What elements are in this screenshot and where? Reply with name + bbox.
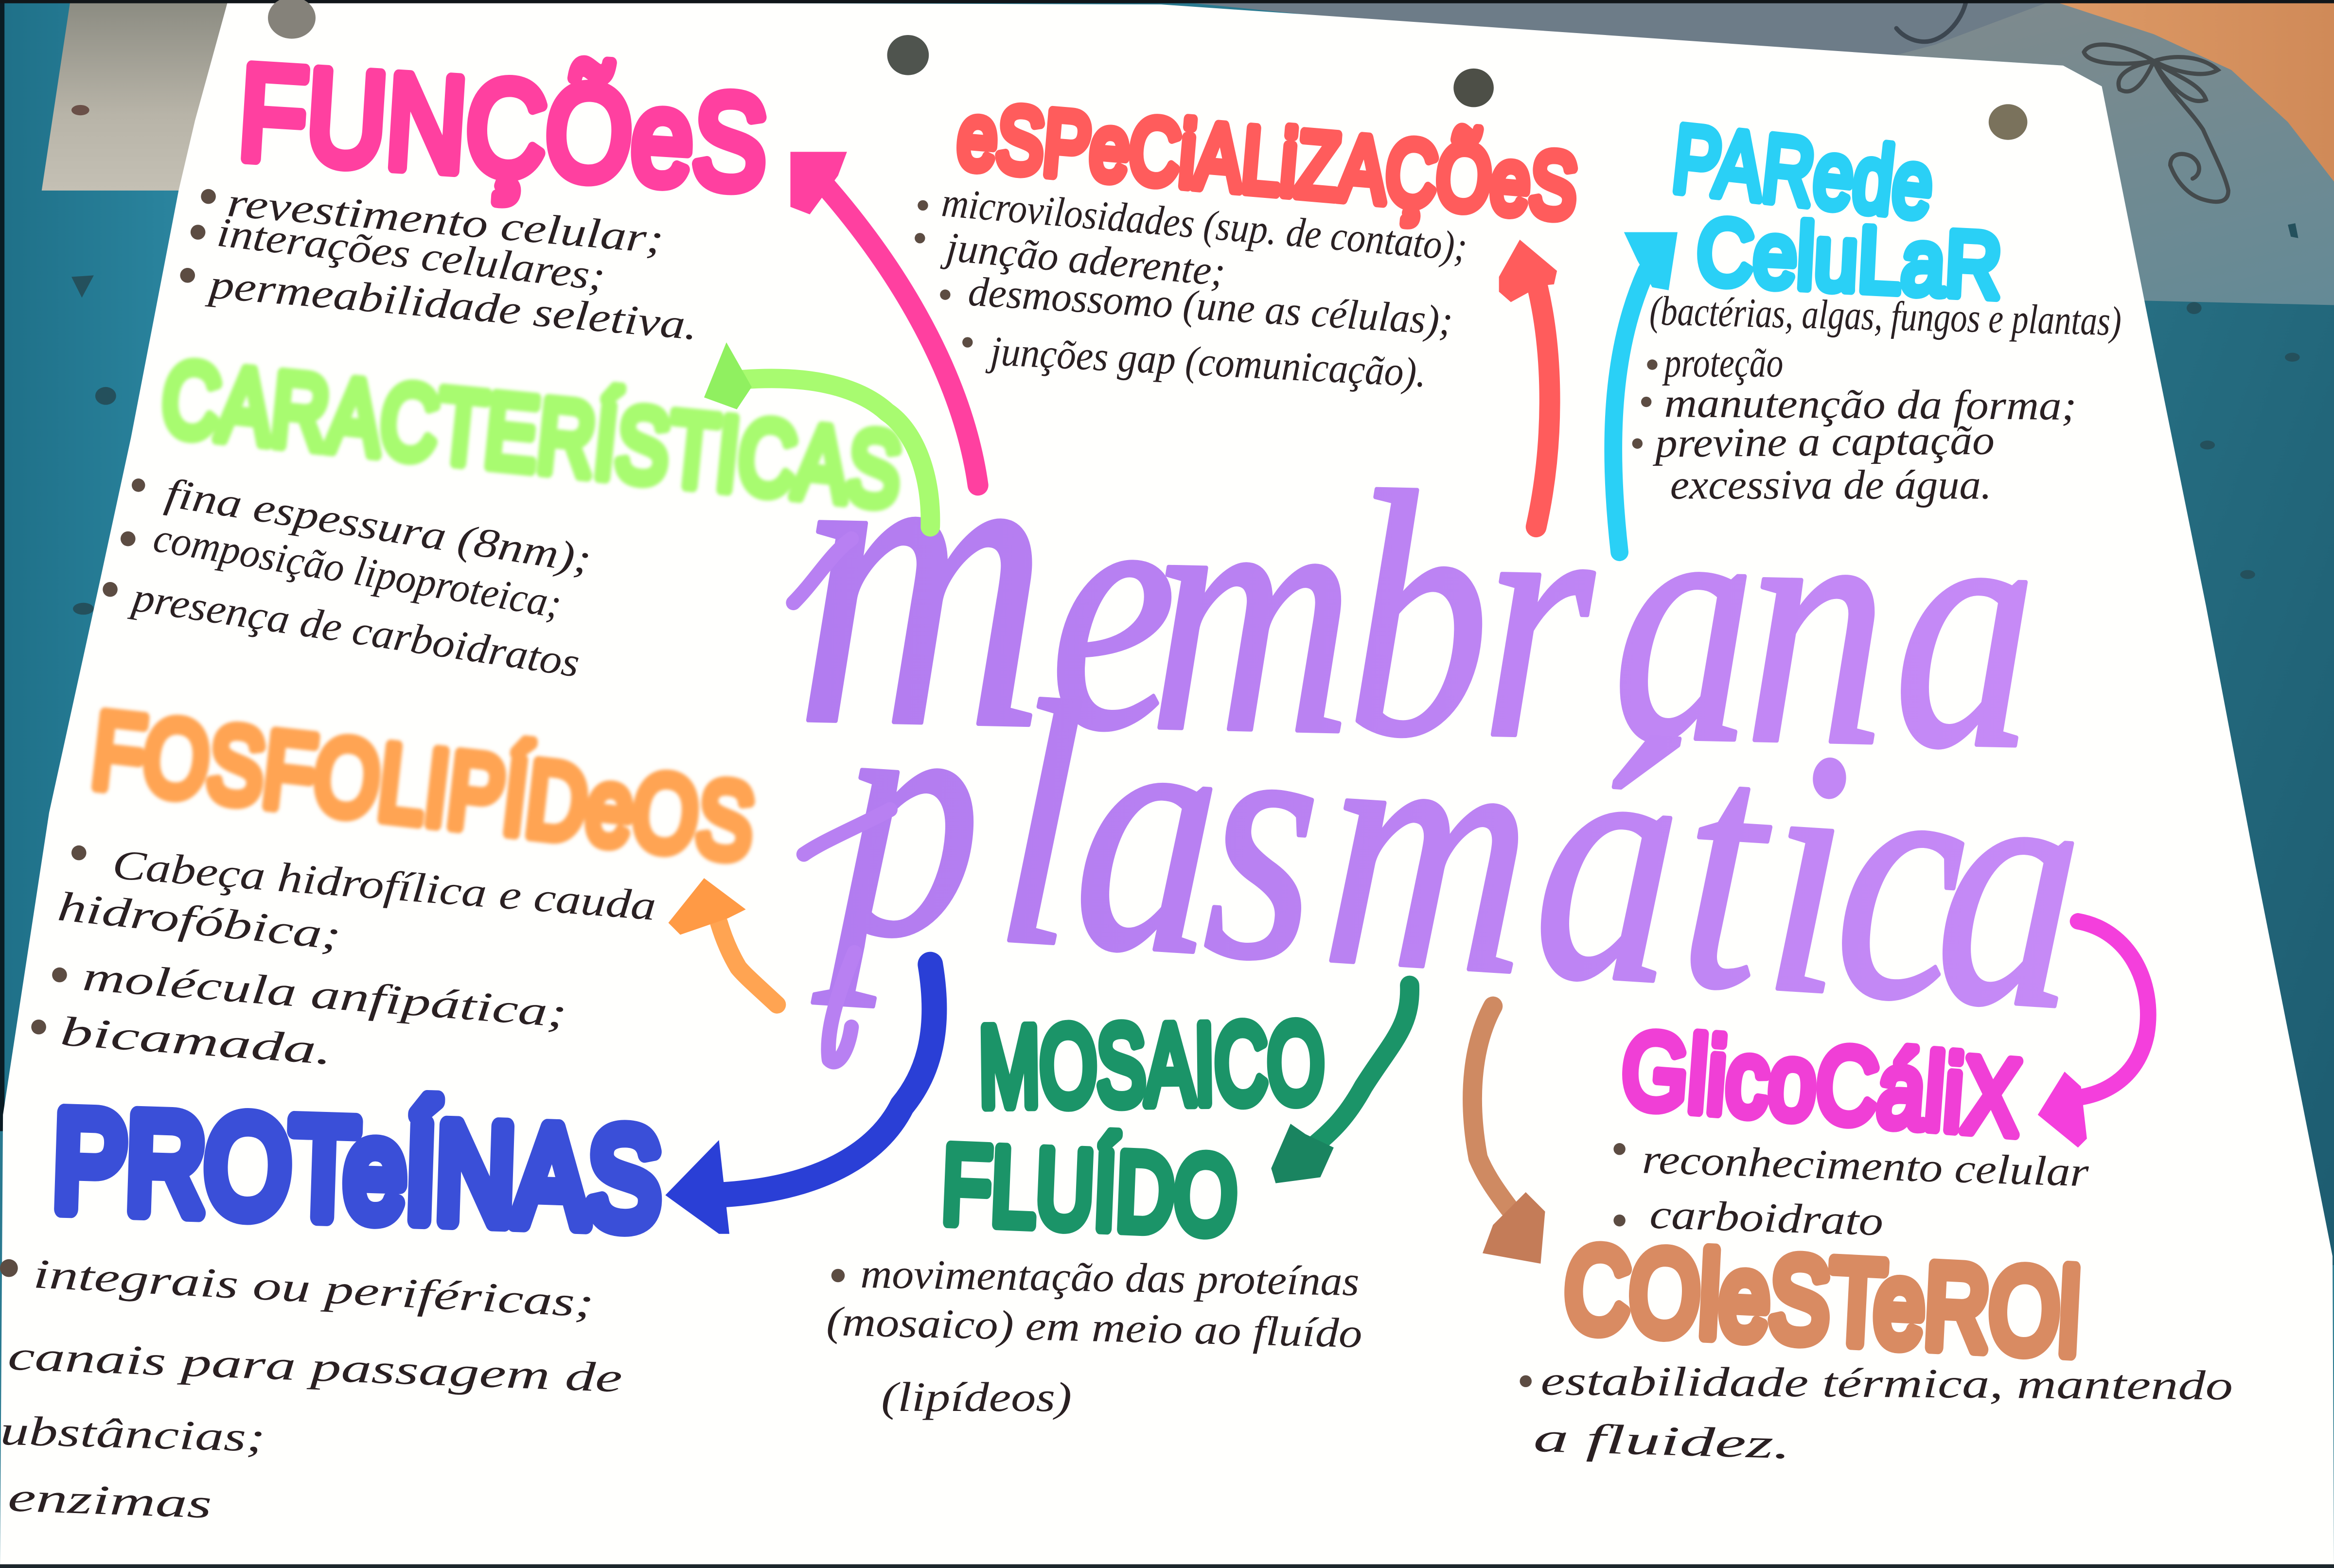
title: Membrana plasmática: m [794, 335, 1053, 818]
heading: funções: FUNÇÕeS [235, 37, 772, 219]
bullet list: colesterol: a fluidez. [1533, 1414, 1792, 1467]
panel: especializações [915, 84, 1581, 396]
bullet list: fosfolipídeos [31, 841, 658, 1074]
bullet list: fosfolipídeos: Cabeça hidrofílica e cauda [111, 841, 658, 929]
bullet list: funções: revestimento celular; [226, 179, 666, 263]
panel: proteínas [0, 1082, 663, 1527]
heading: parede celular: PARede [1668, 105, 1938, 239]
arrow: to colesterol [1472, 1006, 1545, 1264]
fabric spots [71, 105, 2300, 615]
bullet list: mosaico fluído: (mosaico) em meio ao fluído [826, 1298, 1362, 1357]
bullet list: funções: permeabilidade seletiva. [204, 261, 700, 349]
title: Membrana plasmática [794, 335, 2092, 1083]
bullet list: proteínas [0, 1251, 623, 1527]
bullet list: funções: interações celulares; [215, 209, 607, 300]
bullet list: especializações: desmossomo (une as células); [967, 268, 1454, 344]
heading: especializações: eSPeCiALiZAÇÕeS [954, 84, 1581, 239]
bullet list: características: fina espessura (8nm); [162, 470, 594, 582]
bullet list: colesterol: estabilidade térmica, mantendo [1540, 1357, 2233, 1409]
title: Membrana plasmática: plasmática [811, 617, 2092, 1083]
bullet list: glicocálix: carboidrato [1649, 1191, 1884, 1245]
bullet list: características [103, 470, 594, 686]
heading: colesterol: COleSTeROl [1562, 1221, 2083, 1379]
bullet list: parede celular: (bactérias, algas, fungos e plantas) [1649, 287, 2122, 344]
heading: proteínas: PROTeÍNAS [51, 1082, 663, 1257]
bullet list: proteínas: enzimas [7, 1474, 212, 1527]
bullet list: glicocálix: reconhecimento celular [1642, 1136, 2089, 1196]
bullet list: parede celular: previne a captação [1652, 417, 1995, 466]
heading: parede celular [1668, 105, 2004, 317]
arrow: to glicocálix [2038, 921, 2148, 1147]
bullet list: mosaico fluído [826, 1251, 1362, 1420]
bullet list: colesterol [1520, 1357, 2233, 1467]
heading: mosaico fluído: FLUÍDO [940, 1123, 1239, 1258]
panel: parede celular [1632, 105, 2122, 508]
panel: colesterol [1520, 1221, 2233, 1467]
heading: mosaico fluído: MOSAICO [978, 1000, 1325, 1130]
panel: mosaico fluído [826, 1000, 1362, 1420]
title: Membrana plasmática: embrana [1047, 414, 2040, 821]
bullet list: parede celular: manutenção da forma; [1664, 380, 2077, 429]
arrow: to parede celular [1613, 232, 1678, 552]
bullet list: proteínas: integrais ou periféricas; [32, 1251, 595, 1326]
pins [268, 0, 2027, 140]
icon: fabric flower sketch [1896, 0, 2228, 202]
bullet list: glicocálix [1613, 1136, 2089, 1245]
bullet list: proteínas: canais para passagem de [7, 1332, 623, 1401]
bullet list: características: presença de carboidratos [126, 573, 583, 686]
bullet list: mosaico fluído: movimentação das proteínas [860, 1251, 1360, 1304]
bullet list: funções [180, 179, 700, 349]
heading: parede celular: CeluLaR [1695, 200, 2004, 317]
heading: mosaico fluído [940, 1000, 1325, 1258]
bullet list: características: composição lipoproteica; [150, 514, 565, 627]
panel: fosfolipídeos [31, 689, 760, 1074]
heading: características: CARACTERÍSTICAS [157, 340, 906, 529]
bullet list: especializações: junção aderente; [939, 223, 1227, 295]
bullet list: especializações: microvilosidades (sup. de contato); [940, 179, 1469, 270]
bullet list: parede celular: excessiva de água. [1670, 462, 1992, 508]
heading: fosfolipídeos: FOSFOLIPÍDeOS [87, 689, 760, 882]
arrow: to mosaico fluído [1271, 986, 1410, 1183]
panel: características [103, 340, 906, 686]
heading: glicocálix: GlicoCáliX [1618, 1009, 2024, 1158]
bullet list: mosaico fluído: (lipídeos) [881, 1374, 1072, 1420]
bullet list: especializações [915, 179, 1469, 396]
arrow: to características [704, 342, 930, 527]
panel: funções [180, 37, 772, 349]
arrow: to fosfolipídeos [668, 878, 777, 1004]
bullet list: parede celular [1632, 287, 2122, 508]
panel: glicocálix [1613, 1009, 2089, 1245]
arrow: to proteínas [665, 965, 934, 1234]
bullet list: fosfolipídeos: molécula anfipática; [81, 953, 568, 1036]
bullet list: parede celular: proteção [1662, 339, 1783, 386]
bullet list: especializações: junções gap (comunicação). [985, 328, 1427, 396]
arrow: to funções [791, 152, 978, 485]
bullet list: fosfolipídeos: bicamada. [59, 1008, 334, 1074]
bullet list: fosfolipídeos: hidrofóbica; [55, 883, 343, 959]
arrow: to especializações [1499, 240, 1557, 527]
